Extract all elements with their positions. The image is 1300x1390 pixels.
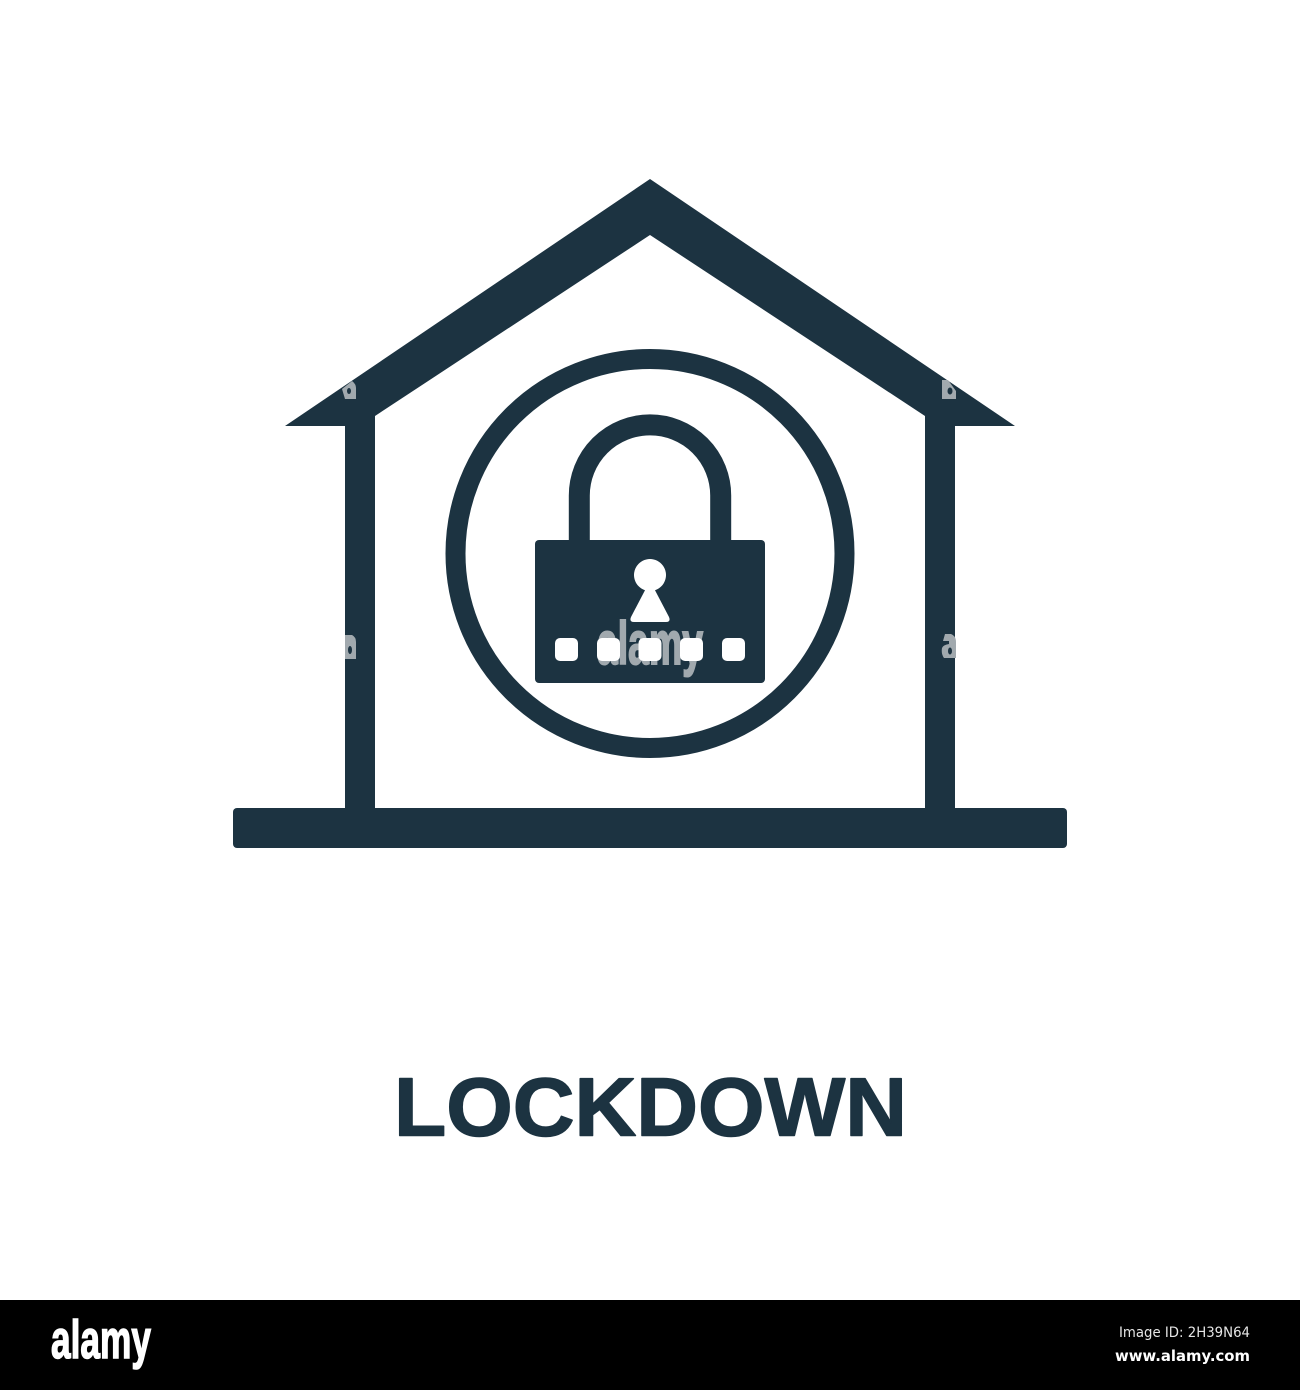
footer website: www.alamy.com: [1115, 1347, 1250, 1365]
padlock keyhole: [630, 559, 670, 622]
footer bar: [0, 1300, 1300, 1390]
footer image id: Image ID: 2H39N64: [1119, 1325, 1250, 1341]
watermark: alamy centre: alamy: [597, 610, 703, 677]
padlock shackle: [579, 425, 721, 542]
watermark fragments on walls and roof: [342, 380, 956, 659]
padlock code dots: [555, 638, 745, 661]
footer logo: alamy: alamy: [51, 1310, 151, 1370]
padlock: [535, 425, 765, 683]
house floor: [233, 808, 1067, 848]
house roof and walls: [285, 179, 1015, 808]
title: LOCKDOWN: LOCKDOWN: [394, 1060, 907, 1154]
padlock body: [535, 540, 765, 683]
icon: house with padlock: [233, 179, 1067, 848]
circle around padlock: [456, 359, 844, 748]
